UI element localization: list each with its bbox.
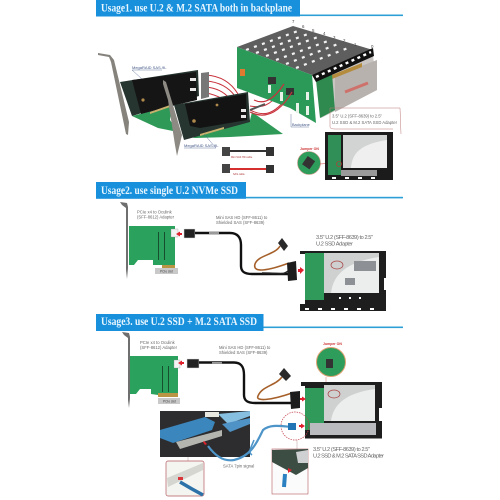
red arrow: lower (299, 424, 305, 428)
callout: adapter text: 3.5" U.2 (SFF-8639) to 2.5" (332, 114, 382, 118)
red arrow (178, 360, 184, 366)
label: cable name (216, 215, 268, 225)
label: cable name: Shielded SAS (SFF-8639) (219, 350, 268, 355)
jumper callout (316, 342, 346, 384)
adapter title: U.2 SSD Adapter (316, 242, 353, 248)
heading: usage 1 (96, 0, 403, 16)
adapter photo (301, 382, 382, 438)
dashed callout circle (281, 412, 309, 440)
adapter photo (325, 132, 393, 180)
bay numbers: 3 (333, 35, 336, 40)
red arrow (176, 232, 182, 236)
label: backplane (291, 114, 310, 127)
bay numbers (292, 19, 374, 49)
jumper callout: Jumper ON (300, 147, 319, 151)
SATA power and plug (255, 238, 297, 281)
jumper callout (298, 147, 336, 174)
bay numbers: 6 (302, 24, 305, 29)
heading: usage 2: Usage2. use single U.2 NVMe SSD (101, 185, 238, 197)
cable cage top (237, 26, 373, 75)
PCIe adapter card (130, 356, 180, 397)
adapter title: U.2 SSD & M.2 SATA SSD Adapter (313, 454, 384, 460)
SAS cable black: Mini SAS HD cable (231, 156, 253, 159)
panel: usage 1 diagram (98, 19, 401, 180)
adapter title (316, 235, 373, 248)
jumper callout: Jumper ON (323, 342, 342, 346)
heading: usage 1: Usage1. use U.2 & M.2 SATA both in backplane (101, 2, 292, 14)
bay numbers: 2 (343, 38, 346, 43)
backplane green side (237, 47, 316, 123)
card 2 bracket (163, 80, 182, 156)
heading: usage 3 (96, 314, 403, 331)
PCIe adapter bracket (122, 332, 130, 408)
card 2 (174, 92, 250, 140)
heading: usage 2 (96, 182, 403, 199)
label: adapter name (140, 340, 178, 350)
label: SATA: SATA 7pin signal (223, 464, 254, 468)
red SAS cables (201, 72, 285, 114)
label: card 1 (132, 65, 167, 79)
label: cable name: Mini SAS HD (SFF-8611) to (219, 345, 271, 350)
SATA power and plug (258, 368, 300, 409)
label: card 1: MegaRAID SAS-9L (132, 65, 167, 70)
inset: motherboard connector (166, 457, 204, 496)
card 1 (120, 70, 199, 116)
label: adapter name: PCIe x4 to Oculink (140, 340, 176, 345)
inset: M.2 SATA connector (272, 440, 308, 494)
label: adapter name: (SFF-8612) Adapter (140, 345, 178, 350)
SAS cable red (222, 164, 274, 176)
label: PCIe slot: PCIe slot (163, 400, 176, 404)
bay numbers: 1 (354, 42, 357, 47)
blue SATA cable (203, 423, 296, 460)
SAS cable red: SAS cable (233, 173, 245, 176)
label: cable name: Shielded SAS (SFF-8639) (216, 220, 265, 225)
bay numbers: 4 (323, 31, 326, 36)
adapter title (313, 447, 384, 460)
bay numbers: 0 (371, 44, 374, 49)
label: adapter name: PCIe x4 to Oculink (137, 210, 173, 214)
red arrow: upper (300, 396, 306, 402)
SAS cable black (222, 147, 274, 159)
label: adapter name: (SFF-8612) Adapter (137, 214, 175, 220)
card 1 bracket (98, 53, 129, 135)
label: adapter name (137, 210, 175, 220)
red arrow (298, 267, 304, 274)
adapter title: 3.5" U.2 (SFF-8639) to 2.5" (313, 447, 370, 453)
label: card 2 (184, 134, 219, 148)
bay numbers: 7 (292, 19, 295, 24)
cage front and drive bay (312, 48, 377, 118)
heading: usage 3: Usage3. use U.2 SSD + M.2 SATA SSD (101, 316, 257, 328)
label: PCIe slot: PCIe slot (160, 270, 173, 274)
label: card 2: MegaRAID SAS-9L (184, 143, 219, 148)
adapter photo (300, 251, 386, 311)
panel: usage 2 diagram (120, 202, 386, 311)
callout: adapter text: U.2 SSD & M.2 SATA SSD Adapter (332, 120, 398, 125)
PCIe adapter card (129, 226, 178, 268)
label: PCIe slot (155, 268, 178, 274)
adapter title: 3.5" U.2 (SFF-8639) to 2.5" (316, 235, 373, 241)
label: cable name: Mini SAS HD (SFF-8611) to (216, 215, 268, 220)
label: PCIe slot (158, 398, 180, 404)
mini SAS cable (184, 229, 290, 274)
motherboard photo (160, 411, 250, 457)
panel: usage 3 diagram (122, 332, 384, 496)
mini SAS cable (187, 359, 292, 403)
callout: adapter text (330, 108, 401, 134)
label: backplane: Backplane (292, 123, 310, 127)
PCIe adapter bracket (120, 202, 128, 279)
label: cable name (219, 345, 271, 355)
bay numbers: 5 (312, 28, 315, 33)
green boards under cards (132, 106, 283, 138)
